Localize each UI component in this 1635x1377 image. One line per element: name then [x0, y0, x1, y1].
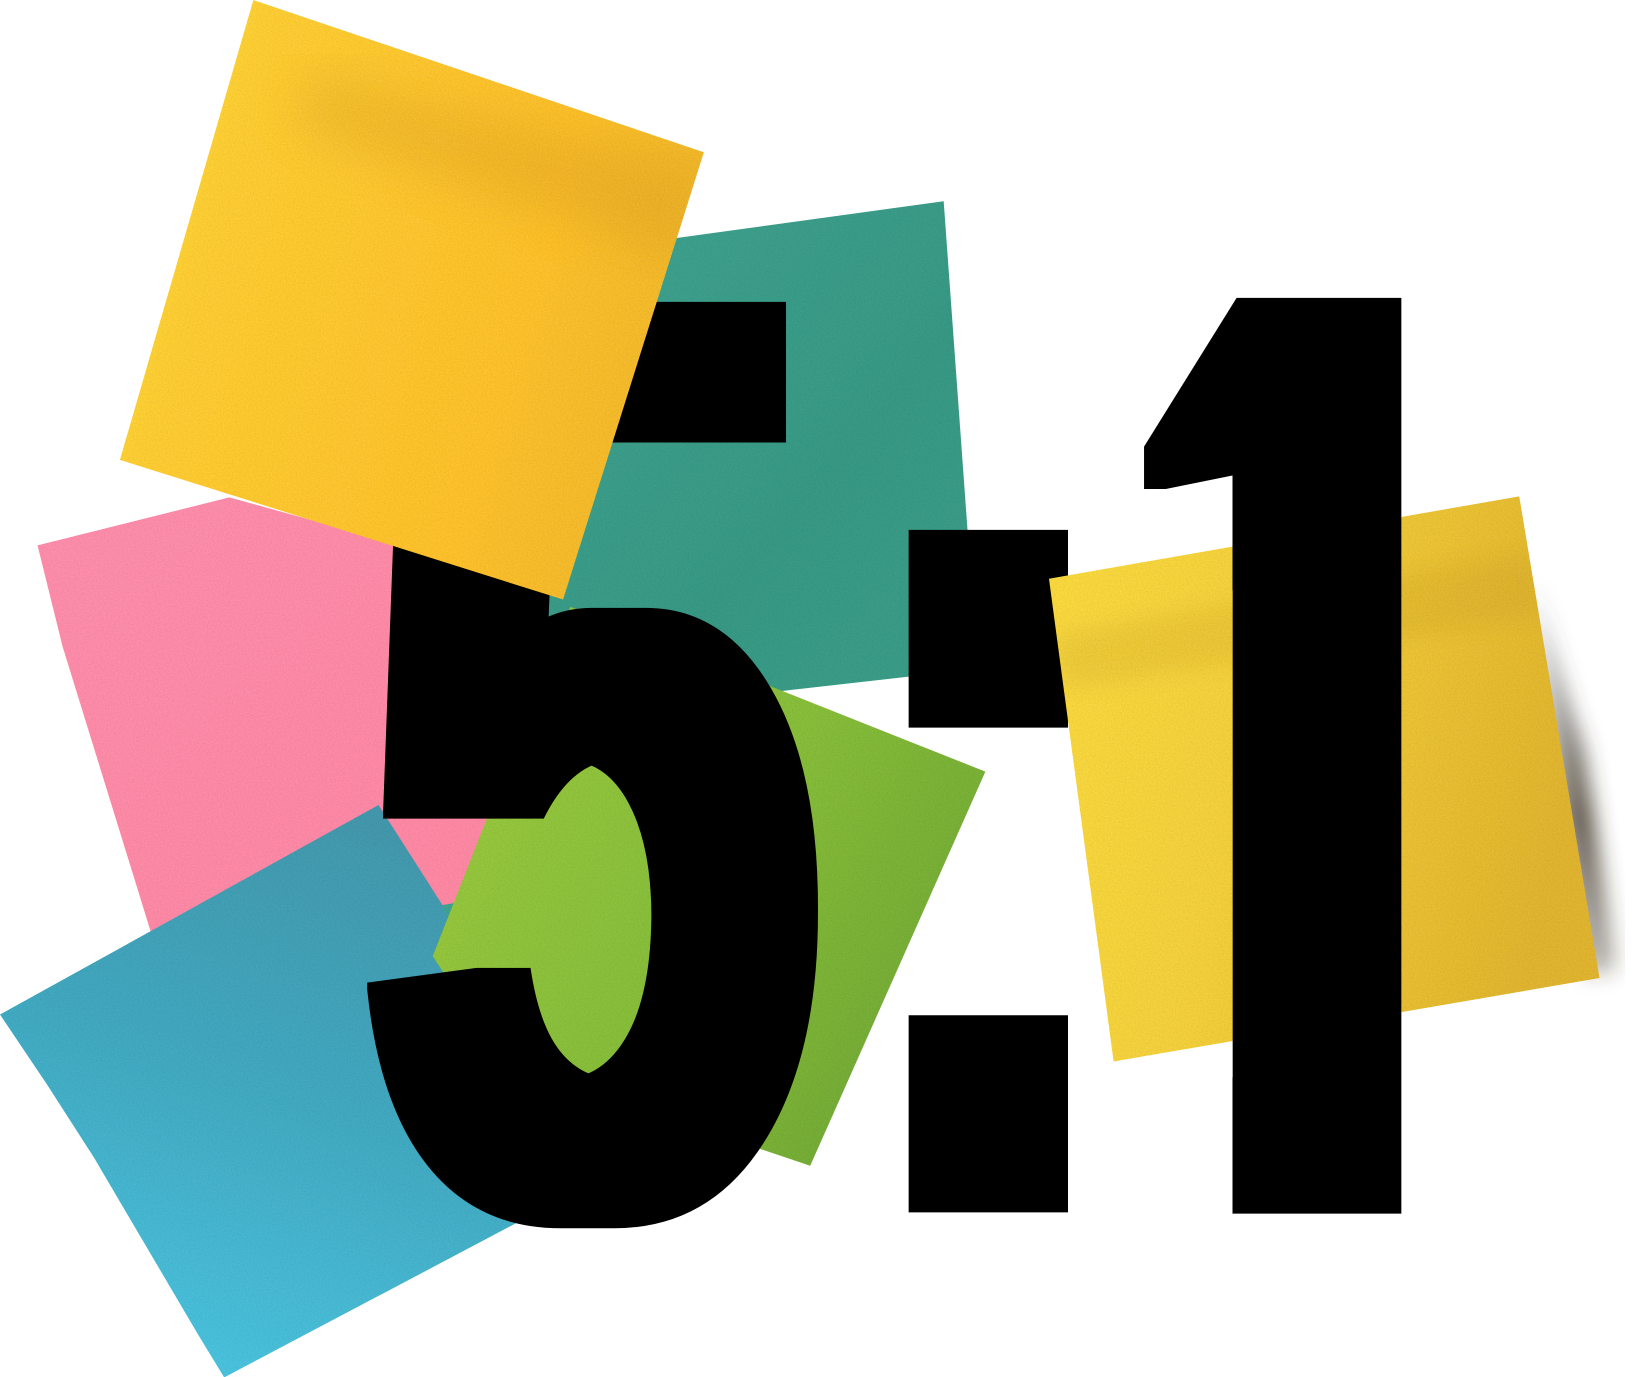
note: teal [524, 201, 972, 719]
note: large yellow on top of the 5 [120, 0, 709, 600]
note: blue [0, 805, 542, 1377]
note: right yellow [1049, 496, 1600, 1061]
note: green [433, 607, 985, 1166]
note: pink [38, 497, 553, 938]
shadow of right yellow note [1533, 584, 1616, 975]
